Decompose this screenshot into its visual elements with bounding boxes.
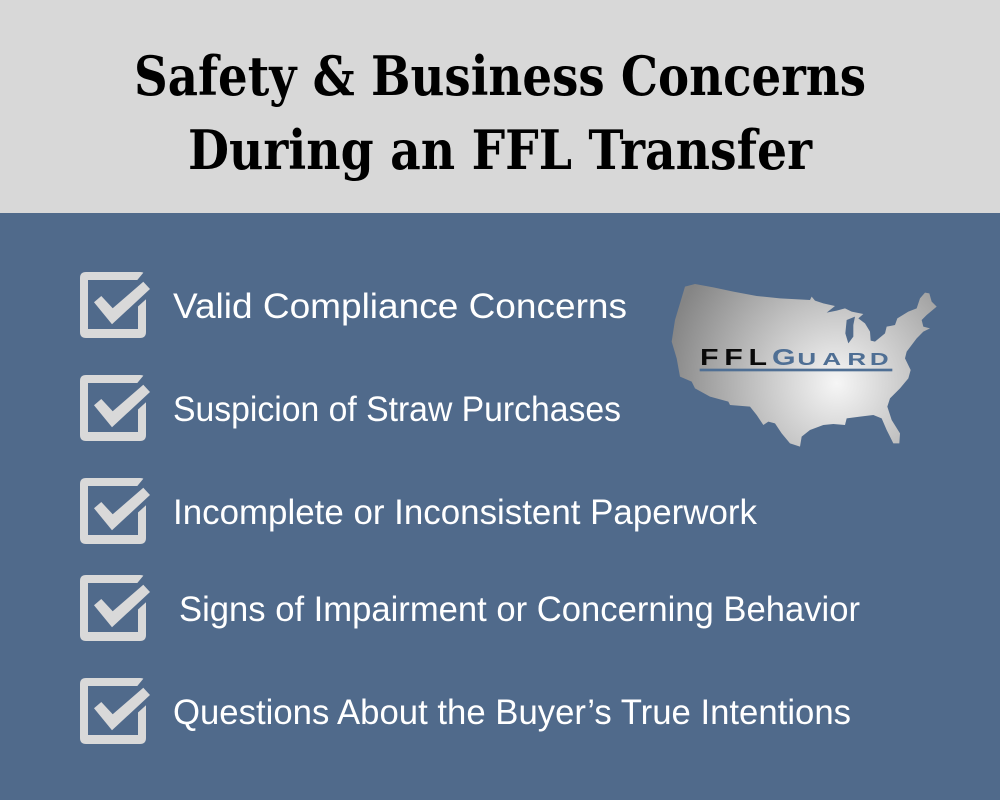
- checklist item: valid compliance concerns: [80, 269, 627, 338]
- checklist item: paperwork: Incomplete or Inconsistent Paperwork: [173, 493, 757, 532]
- map silhouette: [672, 284, 937, 447]
- checklist item: straw purchases: [80, 372, 621, 441]
- title: [134, 44, 866, 182]
- checklist item: impairment: Signs of Impairment or Concerning Behavior: [179, 590, 860, 629]
- lake michigan: [845, 317, 855, 343]
- checklist item: valid compliance concerns: Valid Compliance Concerns: [173, 287, 627, 326]
- wordmark: [700, 344, 889, 370]
- wordmark underline: [700, 369, 892, 371]
- wordmark: UARD: [797, 349, 889, 369]
- wordmark: G: [772, 344, 796, 370]
- checklist item: buyer intentions: Questions About the Buyer’s True Intentions: [173, 693, 851, 732]
- checklist item: buyer intentions: [80, 675, 851, 744]
- checklist item: impairment: [80, 572, 860, 641]
- checklist item: paperwork: [80, 475, 757, 544]
- title: Safety & Business Concerns: [134, 44, 866, 108]
- logo: FFL Guard US map: [672, 284, 937, 447]
- wordmark: FFL: [700, 344, 767, 370]
- background panel: [0, 213, 1000, 800]
- checklist item: straw purchases: Suspicion of Straw Purchases: [173, 390, 621, 429]
- header band: [0, 0, 1000, 213]
- title: During an FFL Transfer: [188, 118, 812, 182]
